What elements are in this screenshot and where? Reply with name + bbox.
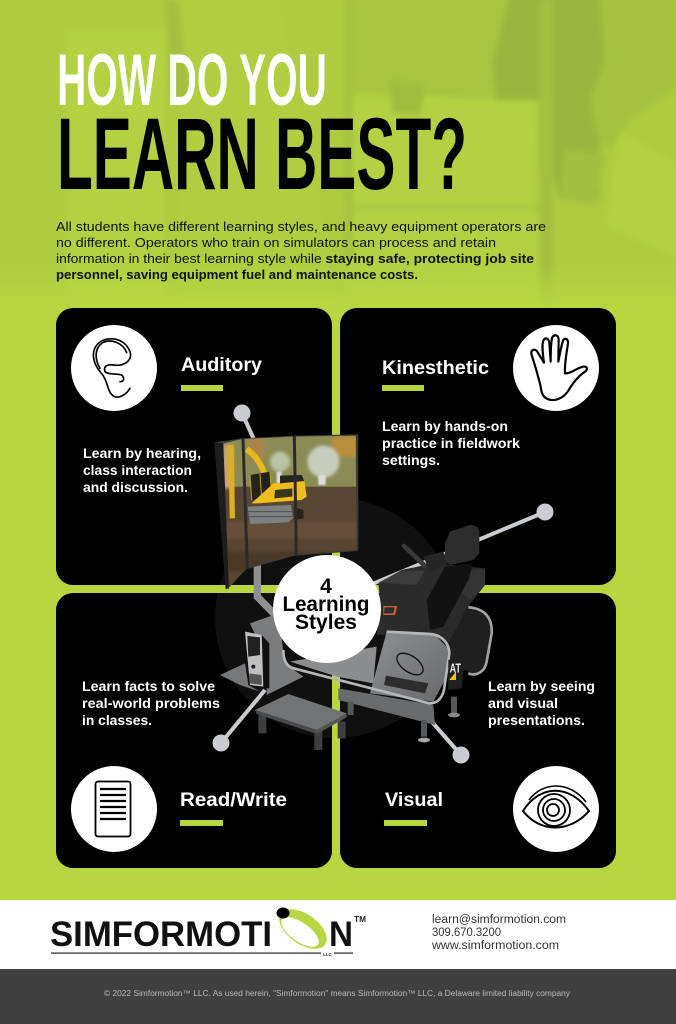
excavator — [231, 445, 307, 524]
accent bar — [180, 820, 223, 826]
intro text: information in their best learning style while staying safe, protecting job site — [56, 251, 534, 266]
copyright: © 2022 Simformotion™ LLC. As used herein, "Simformotion" means Simformotion™ LLC, a Delaware limited liability company — [104, 989, 570, 998]
logo: LLC — [323, 952, 332, 957]
glow circle behind simulator — [215, 498, 455, 738]
panel: auditory — [56, 308, 332, 585]
joystick — [404, 546, 424, 565]
description: in classes. — [82, 713, 152, 728]
contact details: 309.670.3200 — [432, 927, 501, 939]
intro text: All students have different learning styles, and heavy equipment operators are — [56, 219, 546, 234]
connector: read/write — [212, 690, 265, 752]
CAT plate: AT — [450, 662, 461, 676]
step stool — [255, 694, 347, 750]
logo: TM — [354, 914, 366, 924]
panel: visual — [340, 593, 616, 868]
description: practice in fieldwork — [382, 436, 521, 451]
heading: auditory: Auditory — [181, 355, 262, 376]
center badge — [273, 555, 381, 663]
description: Learn by hands-on — [382, 419, 508, 434]
accent bar — [181, 385, 223, 391]
icon: eye — [513, 766, 599, 852]
description — [82, 679, 220, 728]
intro text: no different. Operators who train on simulators can process and retain — [56, 235, 496, 250]
footer: dark band — [0, 969, 676, 1024]
center badge: Styles — [295, 611, 357, 634]
heading: read/write: Read/Write — [180, 790, 287, 811]
status label — [383, 606, 397, 615]
description — [382, 419, 521, 468]
frame rail — [283, 632, 449, 703]
logo: SIMFORMOTI — [50, 915, 272, 954]
simulator — [214, 432, 492, 750]
connector: auditory — [234, 404, 256, 444]
monitor pole and base — [220, 525, 492, 750]
computer tower — [245, 632, 269, 688]
contact details — [431, 914, 566, 952]
icon: hand — [513, 325, 599, 411]
title line 1: HOW DO YOU — [57, 40, 327, 121]
icon: document — [71, 766, 157, 852]
panel: read/write — [56, 593, 332, 868]
footer: white band — [0, 900, 676, 969]
description: Learn facts to solve — [82, 679, 216, 694]
description: Learn by seeing — [488, 679, 595, 694]
floor plate — [290, 647, 377, 683]
accent bar — [382, 385, 424, 391]
accent bar — [384, 820, 427, 826]
description — [488, 679, 595, 728]
logo: N — [329, 915, 353, 954]
center badge: Learning — [282, 593, 370, 616]
center badge: 4 — [320, 575, 332, 598]
monitor — [214, 432, 362, 593]
screen dividers — [243, 436, 296, 568]
seat — [427, 525, 479, 630]
contact details: learn@simformotion.com — [432, 914, 566, 926]
CAT plate — [448, 657, 465, 690]
heading: visual: Visual — [385, 790, 443, 811]
rear housing — [447, 607, 492, 687]
heading: kinesthetic: Kinesthetic — [382, 358, 489, 379]
intro text: personnel, saving equipment fuel and maintenance costs. — [56, 267, 418, 282]
contact details: www.simformotion.com — [431, 940, 559, 952]
description — [83, 446, 201, 495]
computer tray — [220, 663, 260, 692]
intro text — [56, 219, 546, 282]
description: presentations. — [488, 713, 585, 728]
description: and visual — [488, 696, 558, 711]
background — [0, 0, 676, 292]
console top — [378, 571, 425, 585]
description: class interaction — [83, 463, 192, 478]
icon: ear — [71, 325, 157, 411]
under base — [338, 688, 435, 725]
side panel — [370, 632, 448, 702]
description: Learn by hearing, — [83, 446, 201, 461]
connector: kinesthetic — [370, 504, 554, 585]
console mass — [377, 563, 485, 643]
description: and discussion. — [83, 480, 188, 495]
legs — [351, 697, 454, 737]
description: real-world problems — [82, 696, 220, 711]
title — [57, 40, 467, 211]
connector: visual — [432, 722, 470, 764]
logo — [50, 901, 366, 957]
description: settings. — [382, 453, 440, 468]
panel: kinesthetic — [340, 308, 616, 585]
left housing — [250, 613, 303, 695]
